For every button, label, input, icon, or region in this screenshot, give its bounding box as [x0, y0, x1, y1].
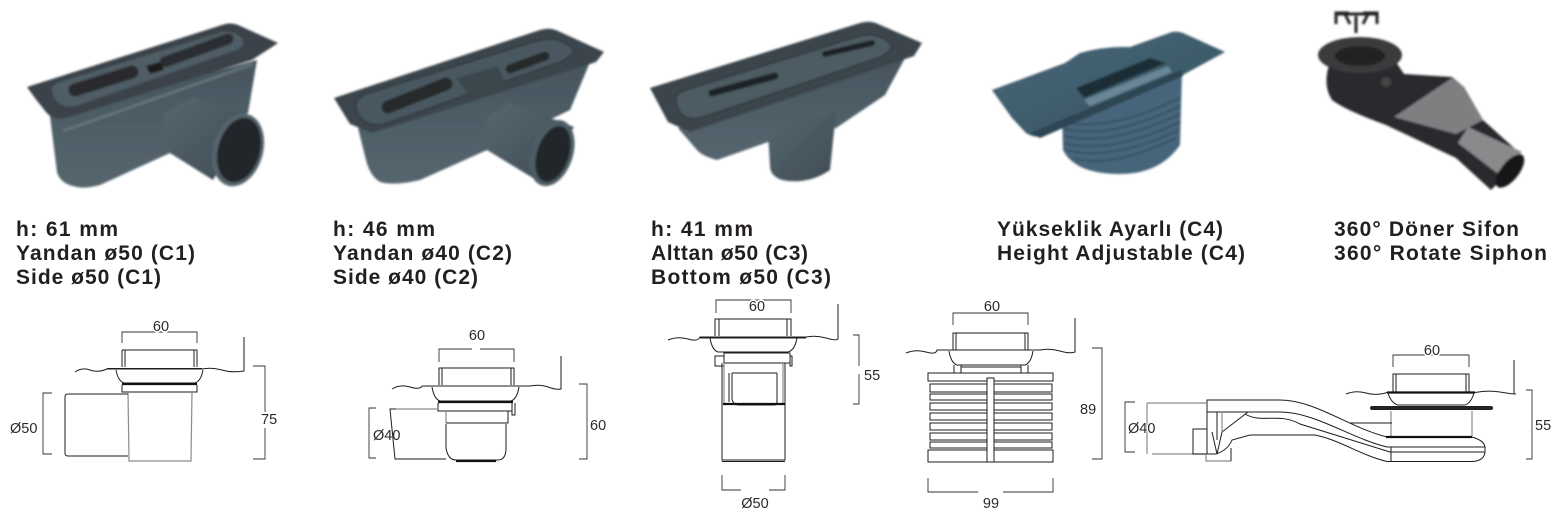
- dimension: 55 height: 55: [864, 368, 880, 384]
- product photo: C1 side outlet drain: [27, 24, 278, 192]
- dimension: 55 height: [853, 335, 880, 404]
- dimension: 60 width: [122, 319, 197, 343]
- dimension: 60 height: 60: [590, 418, 606, 434]
- label: C2: [333, 218, 512, 289]
- label: siphon: 360° Döner Sifon: [1334, 218, 1519, 241]
- dimension: 89 height: [1080, 348, 1102, 459]
- label: C3: Bottom ø50 (C3): [651, 266, 831, 289]
- technical drawing: siphon: [1125, 343, 1551, 462]
- label: C4: [997, 218, 1245, 265]
- dimension: 60 width: [953, 299, 1028, 325]
- dimension: diameter 50: Ø50: [10, 421, 37, 437]
- technical drawing: C2: [369, 328, 606, 461]
- dimension: 55 height: 55: [1535, 418, 1551, 434]
- dimension: 89 height: 89: [1080, 402, 1096, 418]
- dimension: 60 width: 60: [749, 299, 765, 315]
- technical drawing: C4: [906, 299, 1102, 512]
- label: C1: Yandan ø50 (C1): [16, 242, 195, 265]
- product photo: C3 bottom outlet drain: [650, 22, 922, 181]
- dimension: 99 width: [928, 478, 1053, 512]
- product photo: 360 rotating siphon: [1318, 13, 1529, 192]
- dimension: diameter 40: Ø40: [373, 428, 400, 444]
- dimension: 75 height: [253, 366, 277, 459]
- product photo: C4 height adjustable drain: [992, 32, 1225, 174]
- dimension: 60 width: 60: [469, 328, 485, 344]
- dimension: 60 height: [579, 384, 606, 459]
- dimension: diameter 50: [722, 475, 785, 512]
- icon: siphon crown: [1335, 13, 1378, 33]
- dimension: diameter 40: Ø40: [1128, 421, 1155, 437]
- label: C2: h: 46 mm: [333, 218, 435, 241]
- dimension: diameter 40: [369, 408, 400, 458]
- dimension: 60 width: 60: [153, 319, 169, 335]
- dimension: 55 height: [1526, 390, 1551, 459]
- dimension: 75 height: 75: [261, 412, 277, 428]
- dimension: 60 width: 60: [984, 299, 1000, 315]
- label: siphon: [1334, 218, 1547, 265]
- product photo: C2 side outlet drain: [334, 29, 604, 192]
- label: C1: h: 61 mm: [16, 218, 118, 241]
- label: C2: Yandan ø40 (C2): [333, 242, 512, 265]
- label: siphon: 360° Rotate Siphon: [1334, 242, 1547, 265]
- dimension: diameter 40: [1125, 402, 1155, 452]
- label: C4: Yükseklik Ayarlı (C4): [997, 218, 1223, 241]
- label: C1: [16, 218, 195, 289]
- label: C3: Alttan ø50 (C3): [651, 242, 808, 265]
- dimension: 60 width: 60: [1424, 343, 1440, 359]
- technical drawing: C3: [668, 299, 880, 512]
- label: C3: h: 41 mm: [651, 218, 753, 241]
- label: C2: Side ø40 (C2): [333, 266, 478, 289]
- dimension: diameter 50: [10, 393, 52, 454]
- dimension: 60 width: [716, 299, 791, 315]
- technical drawing: C1: [10, 319, 277, 461]
- label: C4: Height Adjustable (C4): [997, 242, 1245, 265]
- dimension: 60 width: [1393, 343, 1469, 367]
- dimension: 99 width: 99: [983, 496, 999, 512]
- dimension: 60 width: [439, 328, 514, 362]
- label: C1: Side ø50 (C1): [16, 266, 161, 289]
- dimension: diameter 50: Ø50: [741, 496, 769, 512]
- label: C3: [651, 218, 831, 289]
